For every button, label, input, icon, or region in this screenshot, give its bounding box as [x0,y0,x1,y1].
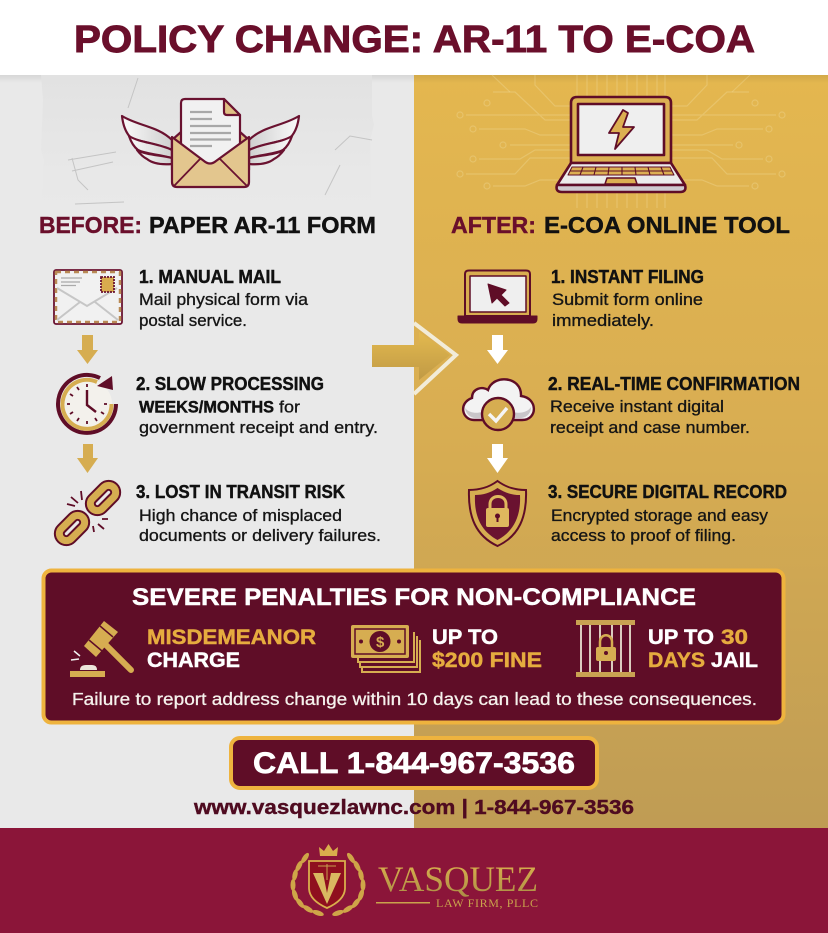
step text: real-time confirmation: Receive instant digital [550,398,724,416]
icon: gavel [70,621,131,677]
penalty: jail: 30 [721,626,748,649]
icon: cloud check [463,379,534,430]
step text: slow processing [136,374,378,437]
logo wordmark: VASQUEZ [378,859,538,899]
heading: before [39,212,376,238]
step text: manual mail: Mail physical form via [139,291,309,309]
icon: right wing [249,116,299,164]
step text: slow processing: 2. SLOW PROCESSING [136,374,324,394]
step text: secure digital record: 3. SECURE DIGITAL RECORD [548,482,787,502]
arrow: down 1 left [77,335,98,364]
panel: severe penalties [44,570,784,722]
icon: big laptop with circuit lines [457,75,785,208]
penalties heading: SEVERE PENALTIES FOR NON-COMPLIANCE [132,584,696,611]
title: POLICY CHANGE: AR-11 TO E-COA [74,19,755,61]
logo wordmark: LAW FIRM, PLLC [436,896,538,910]
arrow: down 2 right [487,444,508,473]
step text: lost in transit: High chance of misplaced [139,507,342,525]
step text: slow processing: government receipt and entry. [139,419,378,437]
step text: real-time confirmation: receipt and case number. [550,419,750,437]
laurel leaves [290,852,366,917]
circuit lines [457,75,785,208]
icon: document [181,99,240,166]
call button: CALL 1-844-967-3536 [253,747,575,780]
penalty: fine: UP TO [432,626,498,649]
penalty: fine [432,626,542,672]
right panel background [414,75,828,828]
icon: jail bars [576,620,635,677]
step text: secure digital record: Encrypted storage and easy [551,507,769,525]
penalty: misdemeanor: CHARGE [147,649,240,672]
step text: instant filing: 1. INSTANT FILING [551,267,704,287]
step text: real-time confirmation: 2. REAL-TIME CONFIRMATION [548,374,800,394]
icon: clock [58,375,116,433]
penalty: fine: $200 FINE [432,649,542,672]
heading: before: PAPER AR-11 FORM [149,212,376,238]
heading: after: AFTER: [451,212,536,238]
penalty: jail: UP TO [648,626,714,649]
step text: instant filing: immediately. [552,312,654,330]
center transition arrow [372,323,456,394]
icon: airmail envelope [54,270,122,324]
step text: lost in transit [136,482,381,545]
penalty: misdemeanor: MISDEMEANOR [147,626,316,649]
penalties note: Failure to report address change within 10 days can lead to these consequences. [72,689,757,709]
left panel background [0,75,414,828]
step text: slow processing: for [279,398,301,416]
header band [0,0,828,75]
step text: secure digital record: access to proof of filing. [551,527,736,545]
step text: slow processing: WEEKS/MONTHS [139,398,274,416]
logo emblem [290,844,366,917]
arrow: down 1 right [487,335,508,364]
icon: money stack: $ [376,634,385,651]
heading: after: E-COA ONLINE TOOL [544,212,790,238]
heading: before: BEFORE: [39,212,142,238]
penalty: jail: DAYS [648,649,705,672]
step text: lost in transit: documents or delivery failures. [139,527,381,545]
icon: laptop cursor [458,270,537,323]
icon: broken chain [56,482,119,544]
step text: real-time confirmation [548,374,800,437]
penalty: jail: JAIL [711,649,758,672]
icon: winged envelope [122,99,299,187]
step text: instant filing: Submit form online [552,291,703,309]
penalty: misdemeanor [147,626,316,672]
step text: manual mail: postal service. [139,312,247,330]
icon: left wing [122,116,172,164]
arrow: down 2 left [77,444,98,473]
icon: money stack [351,625,420,672]
step text: lost in transit: 3. LOST IN TRANSIT RISK [136,482,345,502]
penalty: jail [648,626,758,672]
step text: manual mail [139,267,309,330]
step text: manual mail: 1. MANUAL MAIL [139,267,281,287]
laptop [557,97,685,192]
call button [231,738,597,788]
website and phone: www.vasquezlawnc.com | 1-844-967-3536 [193,797,634,819]
icon: shield lock [469,481,526,546]
step text: instant filing [551,267,704,330]
paper texture background [41,75,374,210]
footer band [0,828,828,933]
step text: secure digital record [548,482,787,545]
